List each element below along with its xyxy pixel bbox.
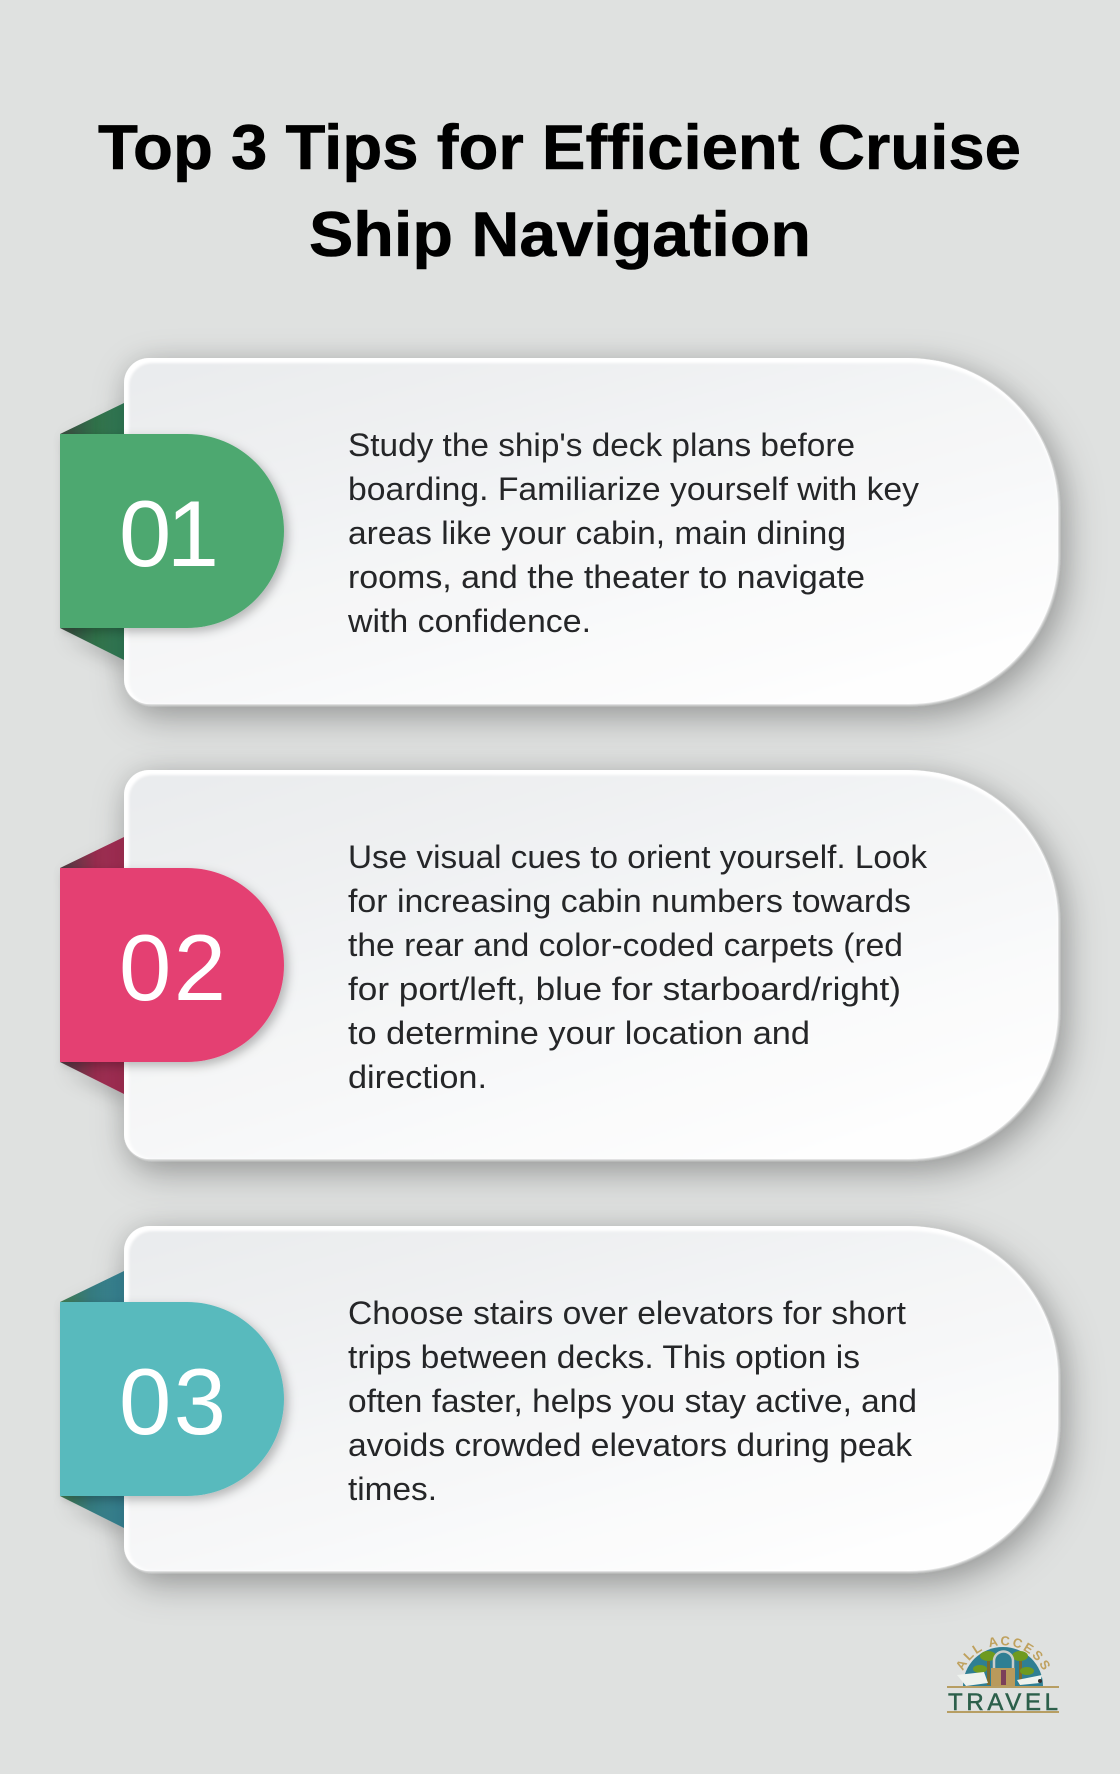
card: tip 3 <box>124 1226 1059 1572</box>
tip 2 text: for increasing cabin numbers towards <box>348 883 911 919</box>
tip 2 text: for port/left, blue for starboard/right) <box>348 971 901 1007</box>
title: Top 3 Tips for Efficient Cruise <box>98 113 1021 183</box>
tip 1 text: Study the ship's deck plans before <box>348 427 855 463</box>
icon: All Access Travel logo <box>947 1636 1059 1716</box>
number tab: 03: 03 <box>119 1349 226 1454</box>
panel: tip 3 <box>60 1226 1059 1572</box>
tip 1 text: with confidence. <box>347 603 591 639</box>
panel: tip 2 <box>60 770 1059 1160</box>
tip 3 text: times. <box>348 1471 437 1507</box>
tip 2 text <box>348 839 928 1095</box>
tip 3 text: often faster, helps you stay active, and <box>348 1383 917 1419</box>
tip 2 text: the rear and color-coded carpets (red <box>348 927 903 963</box>
logo rules <box>947 1686 1059 1713</box>
card: tip 1 <box>124 358 1059 705</box>
number tab: 01 <box>60 434 284 628</box>
logo boats <box>957 1672 1042 1686</box>
logo padlock <box>991 1652 1015 1686</box>
logo palm trees <box>973 1651 1034 1685</box>
tip 2 text: direction. <box>348 1059 487 1095</box>
folded ribbon corners: tip 2 <box>60 837 124 1094</box>
tip 1 text <box>347 427 920 639</box>
tip 1 text: rooms, and the theater to navigate <box>348 559 865 595</box>
number tab: 02 <box>60 868 284 1062</box>
tip 1 text: areas like your cabin, main dining <box>348 515 846 551</box>
folded ribbon corners: tip 3 <box>60 1271 124 1528</box>
tip 3 text: trips between decks. This option is <box>348 1339 860 1375</box>
logo dome <box>963 1647 1043 1686</box>
title: Ship Navigation <box>309 200 811 270</box>
number tab: 02: 02 <box>119 915 226 1020</box>
tip 3 text: avoids crowded elevators during peak <box>348 1427 913 1463</box>
logo arc lettering: ALL ACCESS <box>956 1636 1050 1671</box>
number tab: 01: 01 <box>119 481 219 586</box>
card: tip 2 <box>124 770 1059 1160</box>
tip 2 text: Use visual cues to orient yourself. Look <box>348 839 928 875</box>
number tab: 03 <box>60 1302 284 1496</box>
panel: tip 1 <box>60 358 1059 705</box>
logo wordmark: TRAVEL <box>948 1689 1058 1716</box>
tip 3 text <box>348 1295 917 1507</box>
title <box>98 113 1021 270</box>
tip 3 text: Choose stairs over elevators for short <box>348 1295 906 1331</box>
folded ribbon corners: tip 1 <box>60 403 124 660</box>
tip 1 text: boarding. Familiarize yourself with key <box>348 471 920 507</box>
tip 2 text: to determine your location and <box>348 1015 810 1051</box>
